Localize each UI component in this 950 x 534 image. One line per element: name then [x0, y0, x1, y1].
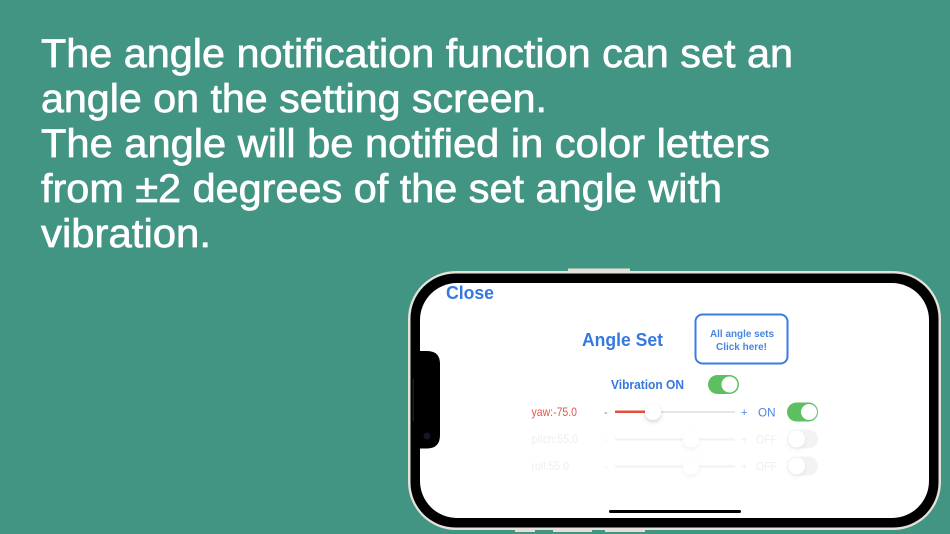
- vibration label: Vibration ON: [611, 378, 684, 392]
- yaw row: +: [741, 407, 747, 419]
- pitch row: [532, 430, 818, 448]
- heading text: The angle will be notified in color letters: [41, 122, 770, 166]
- all angle sets button: All angle sets: [710, 328, 774, 340]
- roll row: -: [604, 461, 608, 473]
- roll row: [532, 456, 818, 476]
- heading text: from ±2 degrees of the set angle with: [41, 167, 722, 211]
- side buttons: [515, 268, 645, 532]
- roll row: roll:55.0: [532, 459, 569, 473]
- phone screen: [420, 283, 929, 518]
- vibration toggle: [708, 375, 739, 394]
- phone mockup: [408, 268, 941, 532]
- roll row: +: [741, 461, 747, 473]
- yaw row: [532, 402, 818, 422]
- pitch row: pitch:55.0: [532, 432, 578, 446]
- heading text: The angle notification function can set an: [41, 32, 793, 76]
- home indicator: [609, 510, 741, 513]
- heading text: vibration.: [41, 212, 211, 256]
- pitch row: +: [741, 434, 747, 446]
- close link: Close: [446, 283, 494, 303]
- phone frame: [408, 271, 941, 530]
- angle set title: Angle Set: [582, 330, 663, 350]
- heading text: [41, 32, 793, 256]
- roll row: OFF: [756, 460, 777, 474]
- yaw row: ON: [758, 406, 776, 420]
- pitch row: OFF: [756, 432, 777, 446]
- pitch row: -: [604, 434, 608, 446]
- yaw row: yaw:-75.0: [532, 405, 577, 419]
- yaw row: -: [604, 407, 608, 419]
- heading text: angle on the setting screen.: [41, 77, 547, 121]
- all angle sets button: [696, 314, 788, 364]
- notch: [412, 351, 440, 448]
- all angle sets button: Click here!: [716, 341, 767, 353]
